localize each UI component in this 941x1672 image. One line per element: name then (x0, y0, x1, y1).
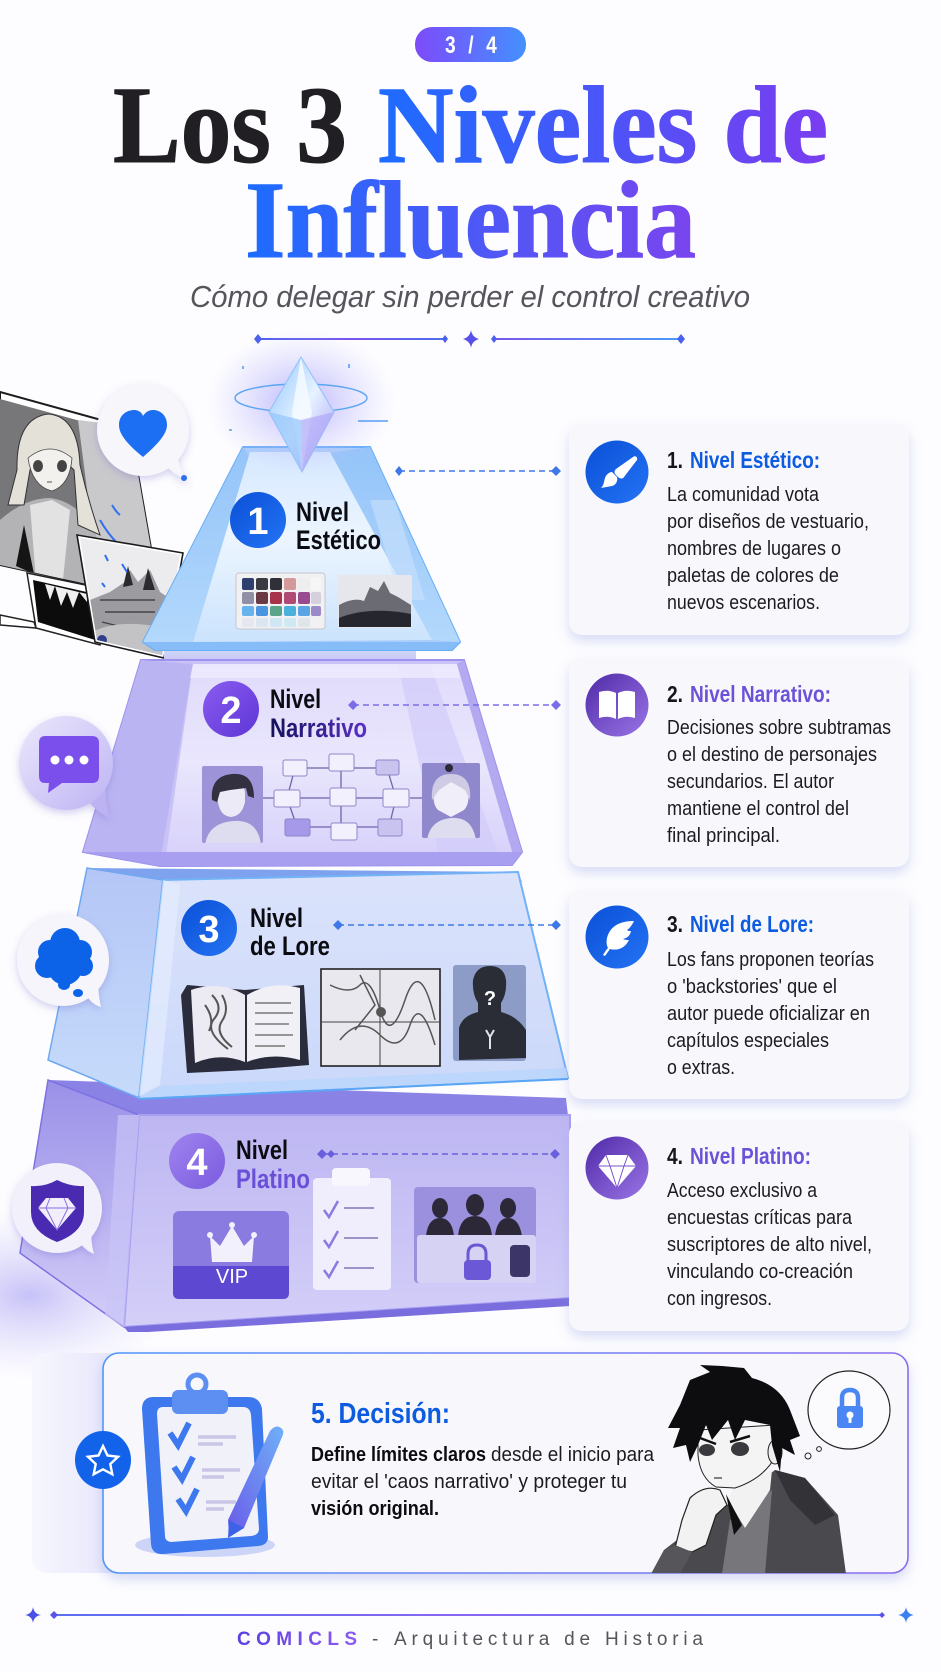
card 3 text: Los fans proponen teorías (667, 949, 874, 971)
level 1 label (296, 497, 381, 555)
level 2 label: Nivel (270, 684, 321, 714)
title: Influencia (245, 159, 696, 281)
level 1 badge (230, 492, 286, 548)
icon: feather (586, 906, 648, 968)
level 1 badge: 1 (247, 501, 269, 543)
manga panel: city landscape (75, 535, 185, 660)
pen (228, 1427, 283, 1535)
card 2 heading: 2. (667, 681, 683, 707)
card 1 text: La comunidad vota (667, 484, 820, 506)
icon: thought cloud (35, 928, 93, 997)
title (113, 64, 828, 281)
icon: brush (586, 440, 648, 504)
girl hair (8, 414, 100, 535)
level 2 badge (203, 681, 259, 737)
decision text: Define límites claros (311, 1444, 486, 1466)
card 2 text: secundarios. El autor (667, 771, 834, 793)
hand (675, 1488, 727, 1552)
icon: heart (119, 410, 167, 457)
mystery character (453, 965, 526, 1061)
card 2 text: mantiene el control del (667, 798, 849, 820)
level 3 label (250, 903, 330, 961)
level 2 label: Narrativo (270, 713, 367, 743)
shirt (722, 1490, 772, 1574)
environment sketch (338, 575, 412, 628)
title: Los 3 (113, 64, 347, 186)
tier 1: estetico (143, 447, 460, 650)
card 1 text: nombres de lugares o (667, 538, 841, 560)
vip card: VIP (216, 1266, 248, 1288)
open book (181, 985, 309, 1073)
girl face (28, 449, 72, 491)
hair (668, 1365, 800, 1472)
icon: diamond (586, 1136, 648, 1200)
level 4 badge (169, 1133, 225, 1189)
icon: shield diamond (31, 1180, 84, 1242)
left character portrait (202, 766, 263, 845)
decision text: desde el inicio para (491, 1444, 655, 1466)
level 4 label: Nivel (236, 1135, 288, 1165)
decision text: visión original. (311, 1498, 439, 1520)
decision panel (75, 1353, 908, 1574)
exclusive group (414, 1187, 536, 1283)
card 4 text: Acceso exclusivo a (667, 1180, 818, 1202)
card 1 heading: Nivel Estético: (690, 447, 820, 473)
thought bubble with lock (805, 1371, 890, 1459)
card 4 text (667, 1180, 872, 1310)
card 1 (569, 424, 909, 635)
connector 3 (333, 920, 561, 930)
neck and face (698, 1425, 776, 1488)
card 4 text: encuestas críticas para (667, 1207, 853, 1229)
page badge 3 / 4: 3 / 4 (445, 31, 497, 59)
card 3 text: autor puede oficializar en (667, 1003, 870, 1025)
decision text: evitar el 'caos narrativo' y proteger tu (311, 1471, 627, 1493)
card 3 text (667, 949, 874, 1079)
hoodie (651, 1470, 846, 1574)
level 3 label: Nivel (250, 903, 303, 933)
decision text (311, 1444, 655, 1520)
manga panel: girl portrait (0, 391, 152, 584)
subtitle: Cómo delegar sin perder el control creativo (190, 279, 750, 314)
level 4 label: Platino (236, 1164, 310, 1194)
ornamental divider (254, 330, 685, 348)
card 2 text: final principal. (667, 825, 780, 847)
level 2 label (270, 684, 367, 743)
mystery character: ? (484, 988, 496, 1010)
tier 2: narrativo (83, 645, 522, 866)
card 2 (569, 658, 909, 867)
card 4 text: con ingresos. (667, 1288, 772, 1310)
color palette (236, 573, 325, 629)
card 3 text: o extras. (667, 1057, 735, 1079)
level 4 label (236, 1135, 310, 1194)
tier 4: platino (20, 1080, 570, 1332)
level 1 label: Nivel (296, 497, 349, 527)
card 1 text: nuevos escenarios. (667, 592, 820, 614)
footer text: COMICLS (237, 1629, 357, 1650)
level 2 badge: 2 (220, 690, 242, 732)
padlock (468, 1245, 486, 1262)
decision heading: 5. Decisión: (311, 1398, 450, 1430)
title: Niveles de (378, 64, 828, 186)
level 3 badge (181, 900, 237, 956)
level 4 badge: 4 (186, 1142, 208, 1184)
icon: chat dots (39, 736, 99, 793)
bubble: shield (12, 1163, 102, 1254)
bubble: chat (19, 716, 113, 818)
footer text (237, 1629, 703, 1650)
icon: clipboard and pen (135, 1375, 283, 1557)
card 4 text: suscriptores de alto nivel, (667, 1234, 872, 1256)
card 1 text: por diseños de vestuario, (667, 511, 869, 533)
level 3 label: de Lore (250, 931, 330, 961)
story flowchart (263, 754, 422, 840)
icon: open book (586, 674, 648, 736)
card 3 (569, 890, 909, 1099)
card 1 heading: 1. (667, 447, 683, 473)
level 3 badge: 3 (198, 909, 220, 951)
connector 1 (395, 466, 561, 476)
card 3 text: capítulos especiales (667, 1030, 829, 1052)
crystal top (206, 330, 396, 474)
footer divider (25, 1607, 914, 1623)
card 3 text: o 'backstories' que el (667, 976, 837, 998)
bubble: thought (17, 914, 109, 1007)
soft glow behind base (0, 1210, 180, 1380)
decision panel glow (32, 1353, 132, 1573)
connector 2 (348, 700, 561, 710)
card 4 heading: Nivel Platino: (690, 1143, 811, 1169)
bubble: heart (97, 384, 189, 481)
card 2 text: o el destino de personajes (667, 744, 877, 766)
manga panel: far left strip (0, 615, 36, 628)
girl cloak (0, 498, 96, 584)
footer text: Arquitectura de Historia (394, 1629, 703, 1650)
icon: star badge (75, 1431, 131, 1489)
vip card (173, 1211, 289, 1299)
connector 4 (317, 1149, 560, 1159)
card 1 text: paletas de colores de (667, 565, 839, 587)
card 4 heading: 4. (667, 1143, 683, 1169)
card 2 text: Decisiones sobre subtramas (667, 717, 891, 739)
page badge 3 / 4 (415, 27, 526, 62)
footer text: - (372, 1629, 378, 1650)
icon: padlock (837, 1390, 863, 1428)
crown (207, 1222, 257, 1262)
manga collage (0, 392, 185, 660)
card 2 text (667, 717, 891, 847)
card 3 heading: 3. (667, 911, 683, 937)
card 3 heading: Nivel de Lore: (690, 911, 814, 937)
tier 3: lore (48, 868, 568, 1100)
card 4 (569, 1121, 909, 1331)
level 1 label: Estético (296, 525, 381, 555)
card 1 text (667, 484, 869, 614)
lore map (321, 969, 440, 1066)
right character portrait (422, 763, 480, 840)
card 2 heading: Nivel Narrativo: (690, 681, 831, 707)
manga character thinking (651, 1365, 846, 1574)
manga panel: dark forest (27, 573, 110, 645)
survey clipboard (313, 1168, 391, 1290)
card 4 text: vinculando co-creación (667, 1261, 853, 1283)
